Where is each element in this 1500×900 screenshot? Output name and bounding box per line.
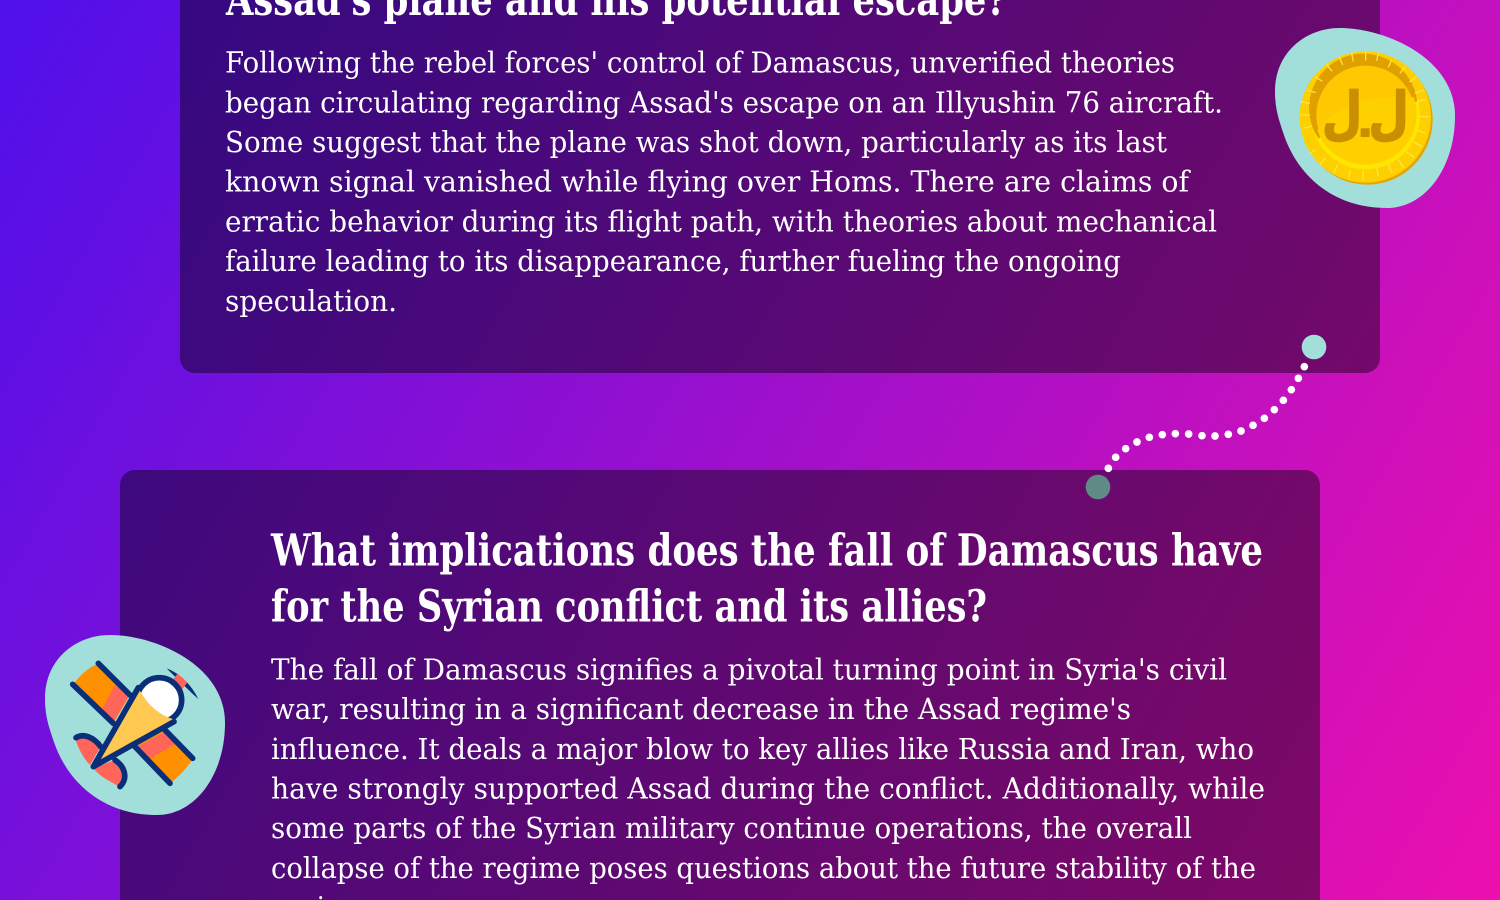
text block: Assad's plane answer: began circulating regarding Assad's escape on an Illyushin 76 aircraft.	[225, 85, 1223, 119]
heading: implications: What implications does the fall of Damascus have	[270, 526, 1263, 576]
text block: implications answer: collapse of the regime poses questions about the future stability of the	[271, 851, 1256, 885]
text block: implications answer: The fall of Damascus signifies a pivotal turning point in Syria's civil	[271, 652, 1227, 686]
text block: implications answer: have strongly supported Assad during the conflict. Additionally, while	[271, 772, 1265, 806]
panel: implications	[120, 470, 1320, 900]
text block: Assad's plane answer: known signal vanished while flying over Homs. There are claims of	[225, 165, 1191, 199]
icon glyph: Syrian pound sign	[1322, 81, 1409, 147]
lower wing	[135, 730, 193, 783]
upper wing	[73, 663, 130, 723]
text block: implications answer: war, resulting in a significant decrease in the Assad regime's	[271, 692, 1131, 726]
icon glyph: Syrian pound sign: ل	[1322, 81, 1362, 147]
icon glyph: Syrian pound sign: ل	[1369, 81, 1409, 147]
tail fins	[75, 736, 101, 765]
body	[137, 678, 182, 722]
arrow: dotted connector	[1086, 335, 1326, 499]
propeller	[167, 668, 198, 699]
text block: Assad's plane answer: failure leading to its disappearance, further fueling the ongoing	[225, 244, 1121, 278]
heading: implications: for the Syrian conflict and its allies?	[271, 582, 987, 632]
heading: implications	[270, 526, 1263, 632]
icon: gold lira coin	[1275, 28, 1455, 208]
text block: implications answer	[271, 652, 1265, 900]
text block: Assad's plane answer: erratic behavior during its flight path, with theories about mechanical	[225, 204, 1217, 238]
text block: Assad's plane answer: speculation.	[225, 284, 397, 318]
text block: implications answer: some parts of the Syrian military continue operations, the overall	[271, 811, 1192, 845]
text block: Assad's plane answer: Some suggest that the plane was shot down, particularly as its last	[225, 125, 1167, 159]
text block: Assad's plane answer	[225, 46, 1223, 318]
panel: Assad's plane	[180, 0, 1380, 373]
icon: airplane	[45, 635, 225, 815]
text block: implications answer: influence. It deals a major blow to key allies like Russia and Iran, who	[271, 732, 1254, 766]
text block: Assad's plane answer: Following the rebel forces' control of Damascus, unverified theories	[225, 46, 1175, 80]
